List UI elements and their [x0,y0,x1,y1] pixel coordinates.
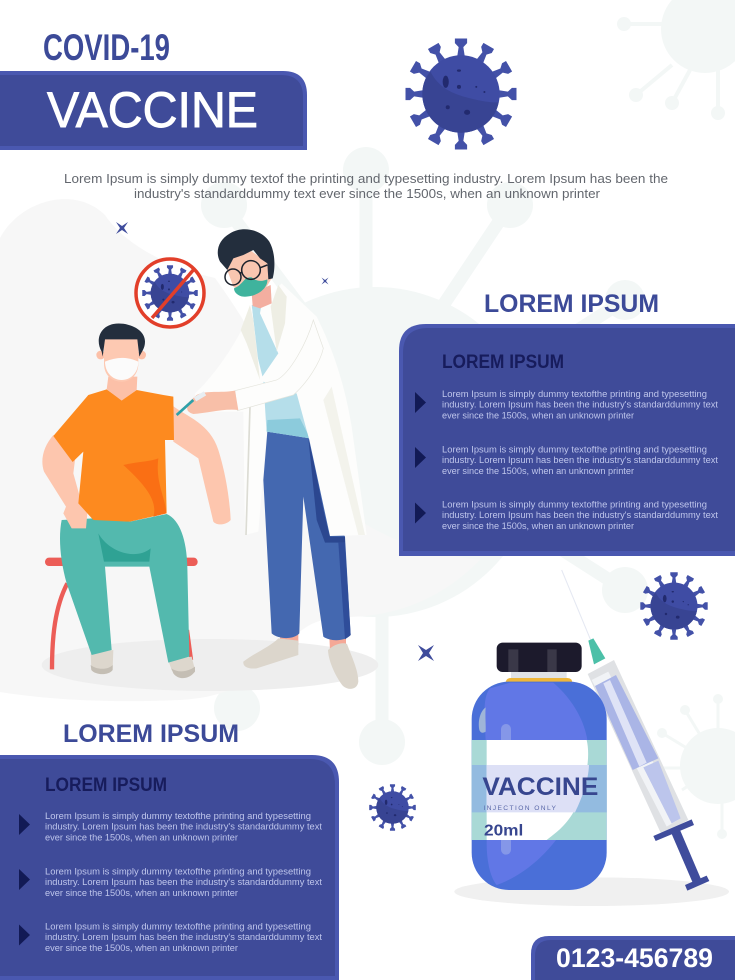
bullet item 3: Lorem Ipsum is simply dummy textofthe printing and typesetting [442,500,707,510]
doctor sleeve [235,320,323,411]
doctor hair [218,229,274,279]
bullet item 2: ever since the 1500s, when an unknown printer [442,466,634,476]
bullet item 1: industry. Lorem Ipsum has been the industry's standarddummy text [442,400,719,410]
panel: left info [0,755,339,980]
bullet item 3 [415,500,719,531]
doctor [177,229,367,689]
intro text: Lorem Ipsum is simply dummy textof the printing and typesetting industry. Lorem Ipsum has been the [64,171,668,186]
icon: large virus [406,39,516,149]
patient hair [99,324,145,357]
title: COVID-19: COVID-19 [43,27,170,68]
doctor shoes [243,638,298,669]
bullet item 2: Lorem Ipsum is simply dummy textofthe printing and typesetting [442,444,707,454]
illustration: vaccine bottle and syringe [454,570,729,906]
bullet item 3: Lorem Ipsum is simply dummy textofthe printing and typesetting [45,922,311,932]
doctor trousers [263,432,351,640]
title banner [0,71,307,150]
title: VACCINE: VACCINE [47,82,258,138]
bullet item 1: industry. Lorem Ipsum has been the industry's standarddummy text [45,822,323,832]
icon: star cross lower [418,645,434,661]
doctor neck [252,285,272,308]
bottle [472,643,607,890]
background: top right pale virus [617,0,735,120]
ground shadow [42,639,378,691]
bottle cap [497,643,582,672]
bullet item 3: industry. Lorem Ipsum has been the industry's standarddummy text [45,932,323,942]
bullet item 2 [19,866,323,898]
intro text [64,171,668,201]
patient arm left [42,435,87,528]
patient arm right [172,405,231,524]
heading: left: LOREM IPSUM [63,720,239,748]
icon: no virus sign [136,259,204,327]
panel: right info [399,324,735,556]
phone number: 0123-456789 [556,943,713,973]
panel heading: LOREM IPSUM [442,352,564,373]
bullet item 2 [415,444,719,476]
patient shirt [53,389,174,522]
icon: virus small [369,784,416,831]
label text: VACCINE [482,773,598,801]
bullet item 2: Lorem Ipsum is simply dummy textofthe printing and typesetting [45,866,311,876]
bottle: INJECTION ONLY [483,805,557,812]
bullet item 1: ever since the 1500s, when an unknown printer [45,832,238,842]
bullet item 3 [19,922,323,953]
icon: star cross small [322,278,328,284]
icon: virus right [640,572,708,640]
doctor ankles [280,633,298,645]
doctor glasses [225,261,267,285]
bullet item 2: ever since the 1500s, when an unknown printer [45,888,238,898]
patient ear and face [96,351,105,359]
doctor shirt [252,303,312,438]
panel heading: LOREM IPSUM [45,775,167,796]
background: bottom right pale virus [657,694,735,839]
background: pale grey blob [0,199,480,701]
bottle: 20ml [484,822,523,839]
syringe [562,570,709,891]
intro text: industry's standarddummy text ever since the 1500s, when an unknown printer [134,186,601,201]
bullet item 1: Lorem Ipsum is simply dummy textofthe printing and typesetting [45,811,311,821]
bottle label [472,740,607,840]
icon: star cross left [116,222,128,234]
patient [42,324,231,678]
bullet item 3: industry. Lorem Ipsum has been the industry's standarddummy text [442,510,719,520]
phone panel [531,936,735,980]
bullet item 2: industry. Lorem Ipsum has been the industry's standarddummy text [442,455,719,465]
illustration: patient and doctor [42,229,378,691]
doctor coat [260,283,367,536]
doctor mask [234,277,267,297]
doctor hand [187,391,238,414]
bullet item 1 [415,389,719,420]
bullet item 1: ever since the 1500s, when an unknown printer [442,410,634,420]
bullet item 1: Lorem Ipsum is simply dummy textofthe printing and typesetting [442,389,707,399]
bullet item 1 [19,811,323,842]
heading: right: LOREM IPSUM [484,290,659,318]
syringe small [177,400,193,415]
bullet item 3: ever since the 1500s, when an unknown printer [442,521,634,531]
bullet item 2: industry. Lorem Ipsum has been the industry's standarddummy text [45,877,323,887]
patient mask [105,358,138,380]
patient neck [107,377,137,401]
background: large pale virus [201,147,648,765]
bullet item 3: ever since the 1500s, when an unknown printer [45,943,238,953]
doctor face [226,250,273,297]
ground shadow [454,877,729,906]
